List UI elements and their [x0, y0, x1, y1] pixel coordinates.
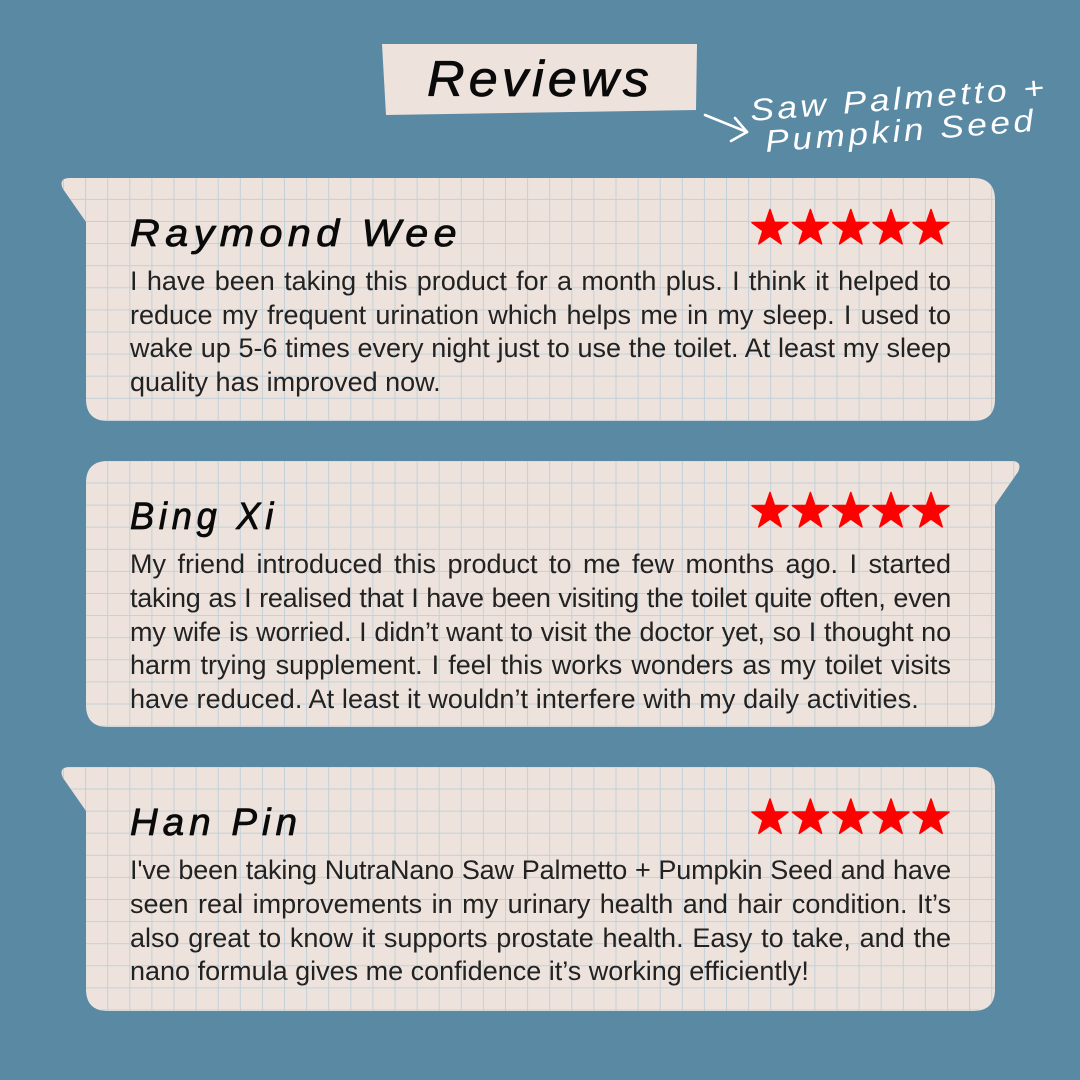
review text: Raymond Wee: quality has improved now.: [130, 367, 441, 397]
reviewer name: Raymond Wee: Raymond Wee: [130, 213, 462, 255]
panel: Han Pin review bubble: [62, 767, 995, 1011]
review text: Bing Xi: harm trying supplement. I feel this works wonders as my toilet visits: [130, 650, 951, 680]
arrow pointing to product name: [705, 115, 747, 141]
review text: Bing Xi: [130, 549, 951, 714]
review text: Han Pin: I've been taking NutraNano Saw Palmetto + Pumpkin Seed and have: [130, 855, 951, 885]
product name note: Saw Palmetto +: [749, 70, 1049, 128]
review text: Bing Xi: My friend introduced this product to me few months ago. I started: [130, 549, 951, 579]
title banner: [382, 44, 697, 115]
star rating: Han Pin: [752, 799, 949, 833]
product name note: [749, 70, 1049, 159]
reviewer name: Bing Xi: Bing Xi: [130, 496, 278, 538]
review text: Han Pin: nano formula gives me confidence it’s working efficiently!: [130, 956, 809, 986]
star rating: Bing Xi: [752, 492, 949, 527]
review text: Raymond Wee: wake up 5-6 times every night just to use the toilet. At least my sleep: [130, 333, 951, 363]
review text: Raymond Wee: reduce my frequent urination which helps me in my sleep. I used to: [130, 300, 951, 330]
reviewer name: Han Pin: Han Pin: [130, 802, 302, 844]
review text: Raymond Wee: [130, 266, 951, 397]
review text: Raymond Wee: I have been taking this product for a month plus. I think it helped to: [130, 266, 951, 296]
title banner: Reviews: [427, 51, 653, 107]
review text: Bing Xi: taking as I realised that I have been visiting the toilet quite often, even: [130, 583, 951, 613]
review text: Bing Xi: my wife is worried. I didn’t want to visit the doctor yet, so I thought no: [130, 617, 951, 647]
review text: Han Pin: seen real improvements in my urinary health and hair condition. It’s: [130, 889, 951, 919]
review text: Bing Xi: have reduced. At least it wouldn’t interfere with my daily activities.: [130, 684, 919, 714]
panel: Raymond Wee review bubble: [62, 178, 995, 421]
product name note: Pumpkin Seed: [764, 103, 1038, 159]
review text: Han Pin: also great to know it supports prostate health. Easy to take, and the: [130, 923, 951, 953]
star rating: Raymond Wee: [752, 210, 949, 244]
panel: Bing Xi review bubble: [86, 461, 1019, 727]
